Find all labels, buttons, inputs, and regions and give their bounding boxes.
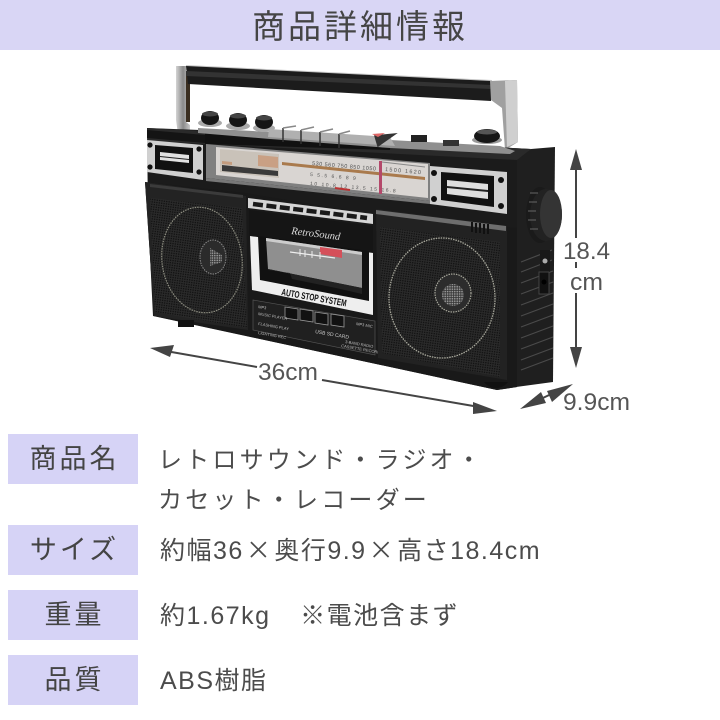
depth dimension arrow [520,384,573,409]
height label: cm [570,269,603,296]
left silver plate [147,140,203,180]
label: weight [8,590,138,640]
value: material: ABS樹脂 [160,667,268,695]
label: size: サイズ [30,535,119,565]
height label: 18.4 [563,238,610,265]
height dimension arrow [570,149,582,368]
tuning dial window [206,144,430,204]
function buttons panel [253,300,386,356]
radio body [145,128,555,390]
tuning dial window: 10 10.8 12 13.5 15 16.8 [310,181,397,195]
function buttons panel: MUSIC PLAYER [258,311,288,321]
right speaker [376,209,508,388]
height label [563,238,610,296]
side jacks [539,250,550,294]
value: product name: レトロサウンド・ラジオ・ [158,447,484,474]
function buttons panel: MP3 MIC [356,321,373,329]
value: weight: 約1.67kg ※電池含まず [160,602,459,630]
cassette deck [250,236,373,315]
tuning dial window: 1500 1620 [385,167,421,176]
tuning dial window: 530 560 750 850 1050 [312,161,376,173]
label: size [8,525,138,575]
cassette label: AUTO STOP SYSTEM [280,287,347,309]
product photo: boombox with dimensions [145,65,630,416]
label: material [8,655,138,705]
label: weight: 重量 [44,600,104,630]
function buttons panel: LIGHTING REC [258,330,287,340]
value: product name [158,447,484,514]
side panel [515,147,555,387]
handle [176,65,518,150]
value: product name: カセット・レコーダー [158,487,430,514]
logo plate [249,210,373,252]
function buttons panel: CASSETTE RECORDER [341,343,386,356]
width dimension arrow [150,345,497,414]
label: product name [8,434,138,484]
function buttons panel: USB SD CARD [315,329,350,341]
width label: 36cm [258,359,318,386]
tuning knob [526,187,562,243]
top silver strip [198,128,515,154]
piano keys [268,126,459,148]
control knobs [198,111,502,144]
title band: 商品詳細情報 [252,8,468,45]
title band [0,0,720,50]
label: product name: 商品名 [30,444,120,474]
side ribs [521,250,553,370]
right silver plate [430,166,507,214]
function buttons panel: FLASHING PLAY [258,321,290,331]
label: material: 品質 [44,665,104,695]
value: size: 約幅36×奥行9.9×高さ18.4cm [160,531,541,567]
logo text: RetroSound [290,226,342,243]
depth label: 9.9cm [563,389,630,416]
left speaker [145,182,249,330]
tuning dial window: 5 5.5 6.6 8 9 [310,172,357,182]
function buttons panel: MP3 [258,304,268,311]
vent strip [248,198,373,224]
function buttons panel: 3-BAND RADIO [345,339,374,349]
